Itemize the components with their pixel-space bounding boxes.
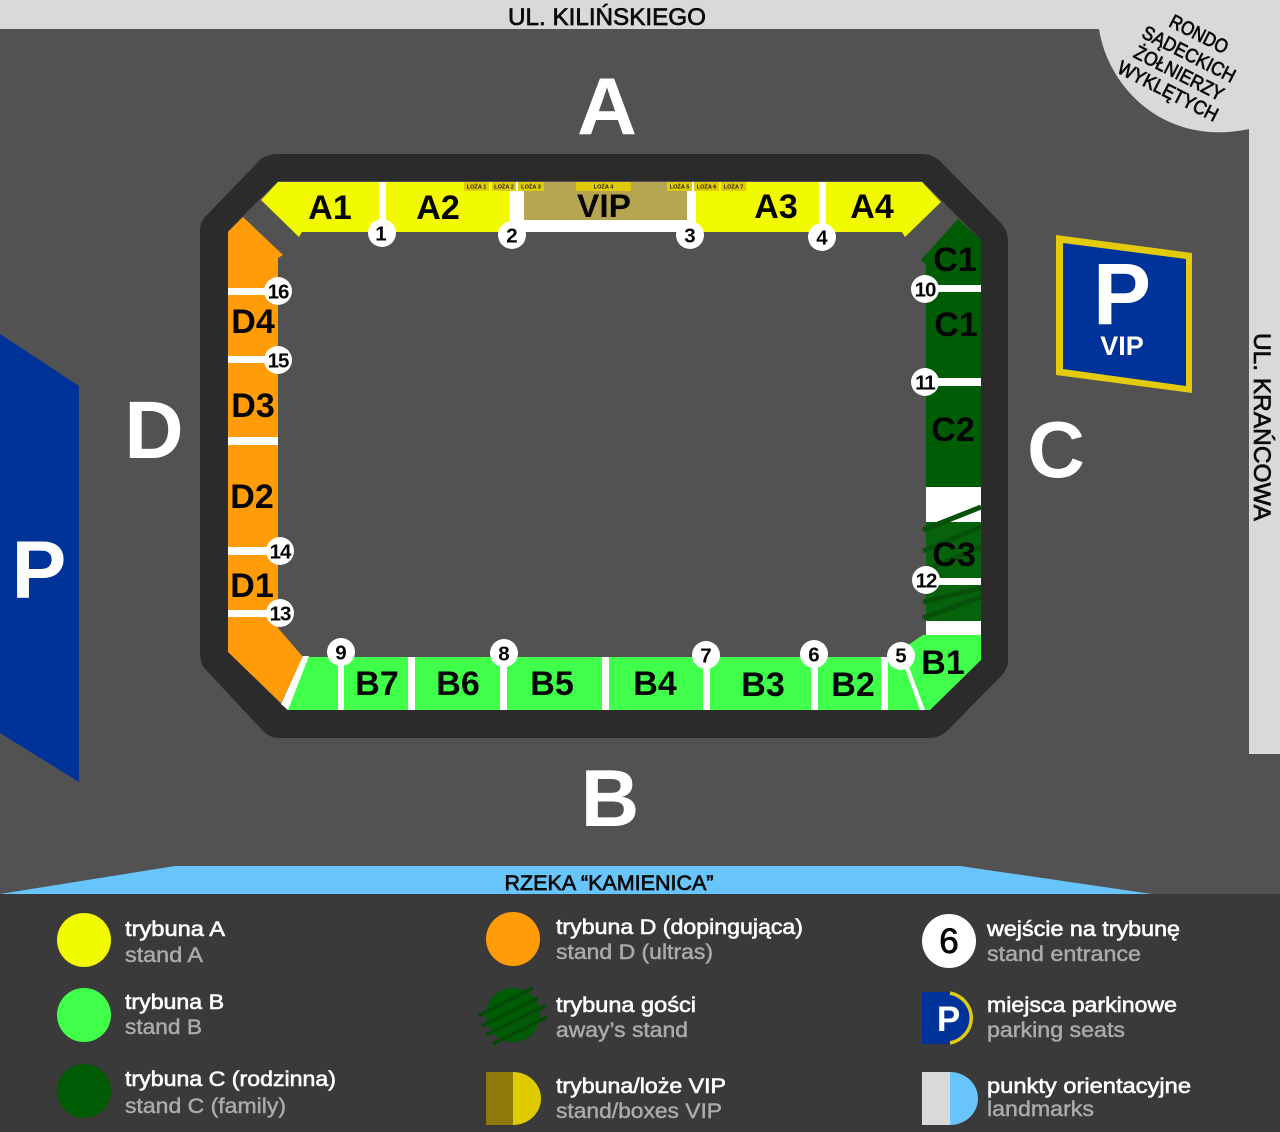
legend: stand C: trybuna C (rodzinna) xyxy=(125,1068,336,1091)
stand B: B2 xyxy=(831,666,875,704)
legend: stand C xyxy=(57,1064,336,1118)
legend: stand B: trybuna B xyxy=(125,991,224,1014)
parking left xyxy=(0,334,79,782)
legend: parking seats: parking seats xyxy=(987,1019,1125,1042)
entrance markers: 9 xyxy=(335,642,347,664)
legend: stand entrance: wejście na trybunę xyxy=(986,918,1180,941)
roundabout: Rondo Sądeckich Żołnierzy Wyklętych: WYKLĘTYCH xyxy=(1114,57,1222,126)
stand A: A1 xyxy=(308,189,352,227)
roundabout: Rondo Sądeckich Żołnierzy Wyklętych: RONDO xyxy=(1166,11,1232,59)
sector letter D: D xyxy=(124,385,184,476)
stand B: B1 xyxy=(921,644,965,682)
stand D: D1 xyxy=(230,567,274,605)
stand B xyxy=(281,635,981,710)
VIP boxes xyxy=(464,182,746,191)
legend: landmarks: punkty orientacyjne xyxy=(987,1075,1191,1098)
legend: away stand: away’s stand xyxy=(556,1019,688,1042)
VIP boxes: LOŻA 4 xyxy=(594,184,614,190)
entrance markers: 12 xyxy=(916,570,937,592)
street: ul. Kilińskiego xyxy=(0,0,1280,31)
street: ul. Krańcowa xyxy=(1248,0,1280,754)
legend: away stand xyxy=(478,988,696,1044)
VIP boxes: LOŻA 3 xyxy=(521,184,541,190)
stand A: A4 xyxy=(850,188,894,226)
stand C: C2 xyxy=(931,411,975,449)
legend: VIP stand/boxes: stand/boxes VIP xyxy=(556,1100,722,1123)
legend: stand entrance: 6 xyxy=(939,922,959,961)
legend: parking seats xyxy=(922,992,1177,1044)
stand A xyxy=(261,182,941,237)
legend: stand entrance: stand entrance xyxy=(987,943,1141,966)
river Kamienica: RZEKA “KAMIENICA” xyxy=(504,872,714,895)
entrance markers: 16 xyxy=(268,280,289,304)
stand B: B7 xyxy=(355,665,399,703)
stand D: D2 xyxy=(230,478,274,516)
VIP boxes: LOŻA 2 xyxy=(494,184,514,190)
entrance markers: 14 xyxy=(270,540,292,564)
parking VIP: VIP xyxy=(1100,331,1144,361)
entrance markers xyxy=(264,219,940,670)
stand B: B6 xyxy=(436,665,480,703)
legend: stand A xyxy=(57,913,225,967)
stadium ring xyxy=(200,154,1008,738)
legend: VIP stand/boxes xyxy=(486,1072,726,1125)
legend: stand D: stand D (ultras) xyxy=(556,941,713,964)
stand D: D3 xyxy=(231,387,275,425)
stand C: C3 xyxy=(932,536,976,574)
pitch area xyxy=(228,181,981,710)
entrance markers: 7 xyxy=(700,644,712,668)
legend: landmarks: landmarks xyxy=(987,1098,1094,1121)
entrance markers: 1 xyxy=(375,222,387,246)
away stand hatching xyxy=(923,507,981,621)
stand D: D4 xyxy=(231,303,275,341)
legend: landmarks xyxy=(922,1072,1191,1125)
legend: parking seats: miejsca parkinowe xyxy=(987,994,1177,1017)
parking left: P xyxy=(12,525,66,616)
legend: stand entrance xyxy=(922,914,1180,968)
entrance markers: 13 xyxy=(270,602,291,626)
stand B: B5 xyxy=(530,665,574,703)
VIP boxes: LOŻA 5 xyxy=(670,184,689,190)
legend: VIP stand/boxes: trybuna/loże VIP xyxy=(556,1075,726,1098)
entrance markers: 5 xyxy=(895,644,907,668)
street: ul. Krańcowa: UL. KRAŃCOWA xyxy=(1248,333,1275,521)
stand C: C1 xyxy=(934,306,978,344)
stand A: A3 xyxy=(754,188,798,226)
entrance markers: 11 xyxy=(915,372,935,394)
entrance markers: 4 xyxy=(816,226,828,250)
stand D xyxy=(228,217,303,703)
legend: stand A: stand A xyxy=(125,944,203,967)
stand C xyxy=(921,219,981,635)
legend: stand D xyxy=(486,912,803,966)
entrance markers: 15 xyxy=(268,350,289,372)
parking VIP: P xyxy=(1093,246,1151,343)
river Kamienica xyxy=(0,866,1152,895)
legend: stand A: trybuna A xyxy=(125,918,225,941)
sector letter A: A xyxy=(577,62,637,152)
VIP boxes: LOŻA 1 xyxy=(467,184,486,190)
street: ul. Kilińskiego: UL. KILIŃSKIEGO xyxy=(508,4,706,31)
entrance markers: 3 xyxy=(684,224,696,248)
roundabout: Rondo Sądeckich Żołnierzy Wyklętych: SĄDECKICH xyxy=(1138,22,1239,88)
VIP stand: VIP xyxy=(577,188,631,224)
sector letter C: C xyxy=(1027,405,1085,494)
VIP boxes: LOŻA 6 xyxy=(697,184,716,190)
VIP stand xyxy=(509,182,696,232)
legend: stand B: stand B xyxy=(125,1016,202,1039)
entrance markers: 6 xyxy=(808,644,820,666)
legend: stand B xyxy=(57,988,224,1042)
legend: parking seats: P xyxy=(937,1000,960,1039)
stand C: C1 xyxy=(933,241,977,279)
stand B: B4 xyxy=(633,665,677,703)
legend panel xyxy=(0,894,1280,1132)
entrance markers: 8 xyxy=(498,642,510,666)
stand A: A2 xyxy=(416,189,460,227)
entrance markers: 10 xyxy=(915,278,936,302)
VIP boxes: LOŻA 7 xyxy=(724,184,743,190)
roundabout: Rondo Sądeckich Żołnierzy Wyklętych: ŻOŁNIERZY xyxy=(1130,41,1228,106)
legend: away stand: trybuna gości xyxy=(556,994,696,1017)
legend: stand C: stand C (family) xyxy=(125,1095,286,1118)
parking VIP xyxy=(1056,235,1192,393)
roundabout: Rondo Sądeckich Żołnierzy Wyklętych xyxy=(1099,11,1249,132)
sector letter B: B xyxy=(581,754,639,844)
stand B: B3 xyxy=(741,666,785,704)
legend: stand D: trybuna D (dopingująca) xyxy=(556,916,803,939)
entrance markers: 2 xyxy=(506,224,518,248)
